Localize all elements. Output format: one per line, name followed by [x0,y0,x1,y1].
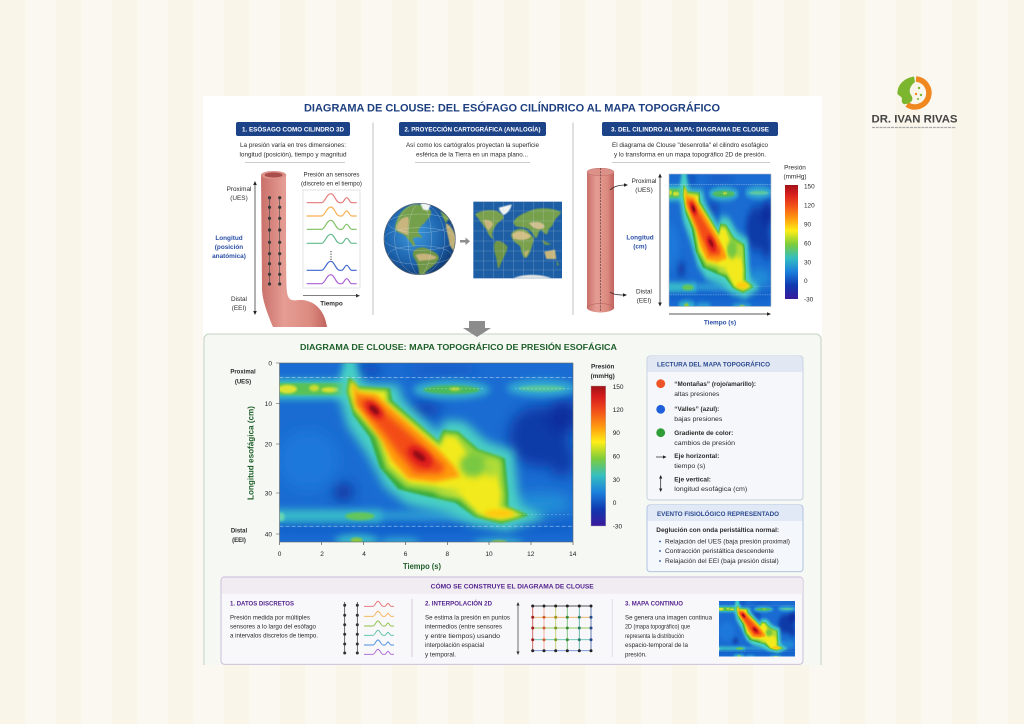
legend: montañas: altas presiones [674,391,719,398]
panel: 2. proyección cartográfica [384,122,562,278]
legend: eje vertical: longitud esofágica (cm) [674,486,747,493]
y axis: 30 [265,490,272,498]
flat world map [473,202,562,278]
callout arrows to labels: Longitud [626,234,654,242]
x axis: 10 [485,551,493,558]
panel: 1. esófago como cilindro 3D [212,122,362,327]
y axis: (EEI) [232,538,246,544]
callout arrows to labels: Proximal [632,178,656,185]
colorbar: main: 0 [613,500,617,507]
panel: cómo se construye el diagrama: CÓMO SE CONSTRUYE EL DIAGRAMA DE CLOUSE [431,582,594,590]
panel: evento fisiológico representado: Relajación del UES (baja presión proximal) [665,538,790,546]
globe illustration [384,203,456,277]
step 1: datos discretos: sensores a lo largo del esófago [230,624,316,630]
panel: lower topographic map panel [204,334,821,665]
arrow: top to bottom [463,321,491,337]
panel: evento fisiológico representado: EVENTO FISIOLÓGICO REPRESENTADO [657,509,779,518]
small topographic map [649,167,774,313]
y axis [230,360,280,544]
heading badge 1: 1. ESÓSAGO COMO CILINDRO 3D [242,124,344,133]
legend: eje vertical [659,475,747,493]
panel: lectura del mapa topográfico: LECTURA DEL MAPA TOPOGRÁFICO [657,360,770,368]
sensor traces chart: Tiempo [320,300,343,308]
colorbar: main: (mmHg) [591,373,615,380]
description 1: La presión varía en tres dimensiones: [240,142,346,149]
y axis: 10 [265,401,272,408]
x axis: 12 [527,551,535,558]
section title: DIAGRAMA DE CLOUSE: MAPA TOPOGRÁFICO DE PRESIÓN ESOFÁGICA [300,341,617,352]
legend: gradiente: cambios de presión [674,440,735,447]
step 3: mapa continuo: presión. [625,652,647,658]
x axis [278,542,577,571]
step 2: interpolación 2D: interpolación espacial [425,642,484,649]
colorbar: main: 150 [613,384,624,391]
panel: top white panel [203,96,822,336]
colorbar: small: 90 [804,222,812,228]
legend: eje horizontal: Eje horizontal: [674,453,719,460]
y axis: Distal [231,528,248,534]
legend: eje vertical: Eje vertical: [674,476,711,484]
y axis: 40 [265,532,272,538]
mini topographic map [719,601,795,656]
step 2: interpolación 2D: y entre tiempos) usando [425,633,500,640]
x axis: 8 [445,551,449,558]
colorbar: small: 60 [804,240,812,248]
colorbar: main: Presión [591,364,615,370]
description 2: esférica de la Tierra en un mapa plano... [416,152,528,158]
step 2: interpolación 2D: y temporal. [425,652,456,658]
step 3: mapa continuo: Se genera una imagen continua [625,614,712,622]
colorbar: main: -30 [613,524,622,530]
brand name: DR. IVAN RIVAS [872,114,958,126]
interpolation grid [531,604,592,652]
colorbar: main: 30 [613,477,620,484]
axis: longitud anatómica: (UES) [230,195,248,202]
sensor traces chart: Presión an sensores [304,172,360,178]
description 3: El diagrama de Clouse "desenrolla" el cilindro esofágico [612,142,768,149]
callout arrows to labels: Distal [636,288,652,296]
panel: evento fisiológico representado [647,505,803,572]
cylinder illustration [587,168,614,312]
description 1: longitud (posición), tiempo y magnitud [240,152,347,158]
step 1: datos discretos: Presión medida por múltiples [230,614,310,622]
y axis: 20 [265,442,272,448]
colorbar: main: 120 [613,407,624,414]
step 2: interpolación 2D: intermedios (entre sensores [425,624,502,630]
step 3: mapa continuo: espacio-temporal de la [625,642,688,649]
description 1 [240,142,347,158]
y axis: Longitud esofágica (cm) [246,406,255,500]
heading badge 3 [602,122,778,136]
legend: montañas: “Montañas” (rojo/amarillo): [674,381,756,388]
sensor traces chart: (discreto en el tiempo) [301,180,362,188]
heading badge 3: 3. DEL CILINDRO AL MAPA: DIAGRAMA DE CLOUSE [611,126,769,133]
x axis: 4 [362,551,366,558]
axis arrow [516,602,520,655]
x axis: 2 [320,551,324,558]
icon: stomach logo [897,76,929,107]
colorbar: small: 150 [804,184,815,190]
description 2: Así como los cartógrafos proyectan la superficie [406,142,539,149]
axis: longitud anatómica: anatómica) [212,253,246,260]
axis: longitud anatómica: Longitud [215,235,243,242]
esophagus illustration [261,171,327,327]
y axis: 0 [268,360,272,368]
step 1: datos discretos: 1. DATOS DISCRETOS [230,600,295,608]
step 2: interpolación 2D: 2. INTERPOLACIÓN 2D [425,598,492,608]
colorbar: small: Presión [784,164,806,172]
description 2 [406,142,539,158]
colorbar: main: 90 [613,430,620,437]
step 2: interpolación 2D [425,598,592,658]
step 3: mapa continuo: 3. MAPA CONTINUO [625,600,683,608]
axis: longitud anatómica [212,181,257,315]
colorbar: main: 60 [613,454,620,460]
x axis: Tiempo (s) [403,562,441,571]
axis: longitud anatómica: (posición [215,244,243,251]
legend: valles [656,405,722,423]
step 2: interpolación 2D: Se estima la presión en puntos [425,614,510,622]
y axis: Proximal [230,370,256,376]
sensor dots and traces [343,601,394,654]
logo: Dr. Ivan Rivas [872,76,958,128]
axis: tiempo: Tiempo (s) [704,320,736,326]
step 3: mapa continuo: 2D (mapa topográfico) que [625,624,690,630]
sensors on esophagus [268,196,281,286]
heading badge 2 [399,122,546,136]
panel: lectura del mapa topográfico [647,356,803,500]
step 1: datos discretos [230,600,394,654]
callout arrows to labels [610,178,656,304]
colorbar: small: 120 [804,202,815,210]
legend: valles: bajas presiones [674,416,722,423]
x axis: 6 [404,551,408,558]
legend: eje horizontal: tiempo (s) [674,463,705,470]
panel: cómo se construye el diagrama [221,577,803,664]
legend: gradiente [656,428,735,447]
colorbar: small: (mmHg) [783,174,807,180]
heading badge 1 [236,122,350,136]
panel: evento fisiológico representado: Deglución con onda peristáltica normal: [656,527,779,534]
main title: DIAGRAMA DE CLOUSE: DEL ESÓFAGO CILÍNDRICO AL MAPA TOPOGRÁFICO [304,102,720,114]
colorbar: small: 30 [804,260,812,266]
main topographic heatmap [261,353,580,550]
x axis: 14 [569,551,577,558]
panel: evento fisiológico representado: Relajación del EEI (baja presión distal) [665,558,779,565]
description 3: y lo transforma en un mapa topográfico 2D de presión. [614,152,766,158]
panel: evento fisiológico representado: Contracción peristáltica descendente [665,548,774,555]
colorbar: small [783,164,815,304]
axis: longitud anatómica: Distal [231,296,247,303]
legend: gradiente: Gradiente de color: [674,430,733,437]
colorbar: main [591,364,624,530]
axis: longitud [658,174,662,306]
axis: tiempo [669,312,771,326]
panel: 3. del cilindro al mapa [587,122,815,326]
legend: eje horizontal [656,453,719,470]
colorbar: small: 0 [804,278,808,285]
colorbar: small: -30 [804,296,814,304]
heading badge 2: 2. PROYECCIÓN CARTOGRÁFICA (ANALOGÍA) [404,124,540,133]
axis: longitud anatómica: Proximal [227,186,251,193]
callout arrows to labels: (cm) [633,244,647,250]
legend: valles: “Valles” (azul): [674,406,719,413]
axis: longitud anatómica: (EEI) [232,305,246,312]
callout arrows to labels: (UES) [635,187,653,194]
description 3 [612,142,768,158]
step 3: mapa continuo: representa la distribución [625,633,684,640]
callout arrows to labels: (EEI) [637,298,651,304]
arrow: globe to map [460,238,470,245]
sensor traces chart [301,172,362,308]
y axis: (UES) [235,380,251,386]
x axis: 0 [278,551,282,558]
step 3: mapa continuo [625,598,797,659]
legend: montañas [656,379,756,398]
step 1: datos discretos: a intervalos discretos de tiempo. [230,632,318,640]
